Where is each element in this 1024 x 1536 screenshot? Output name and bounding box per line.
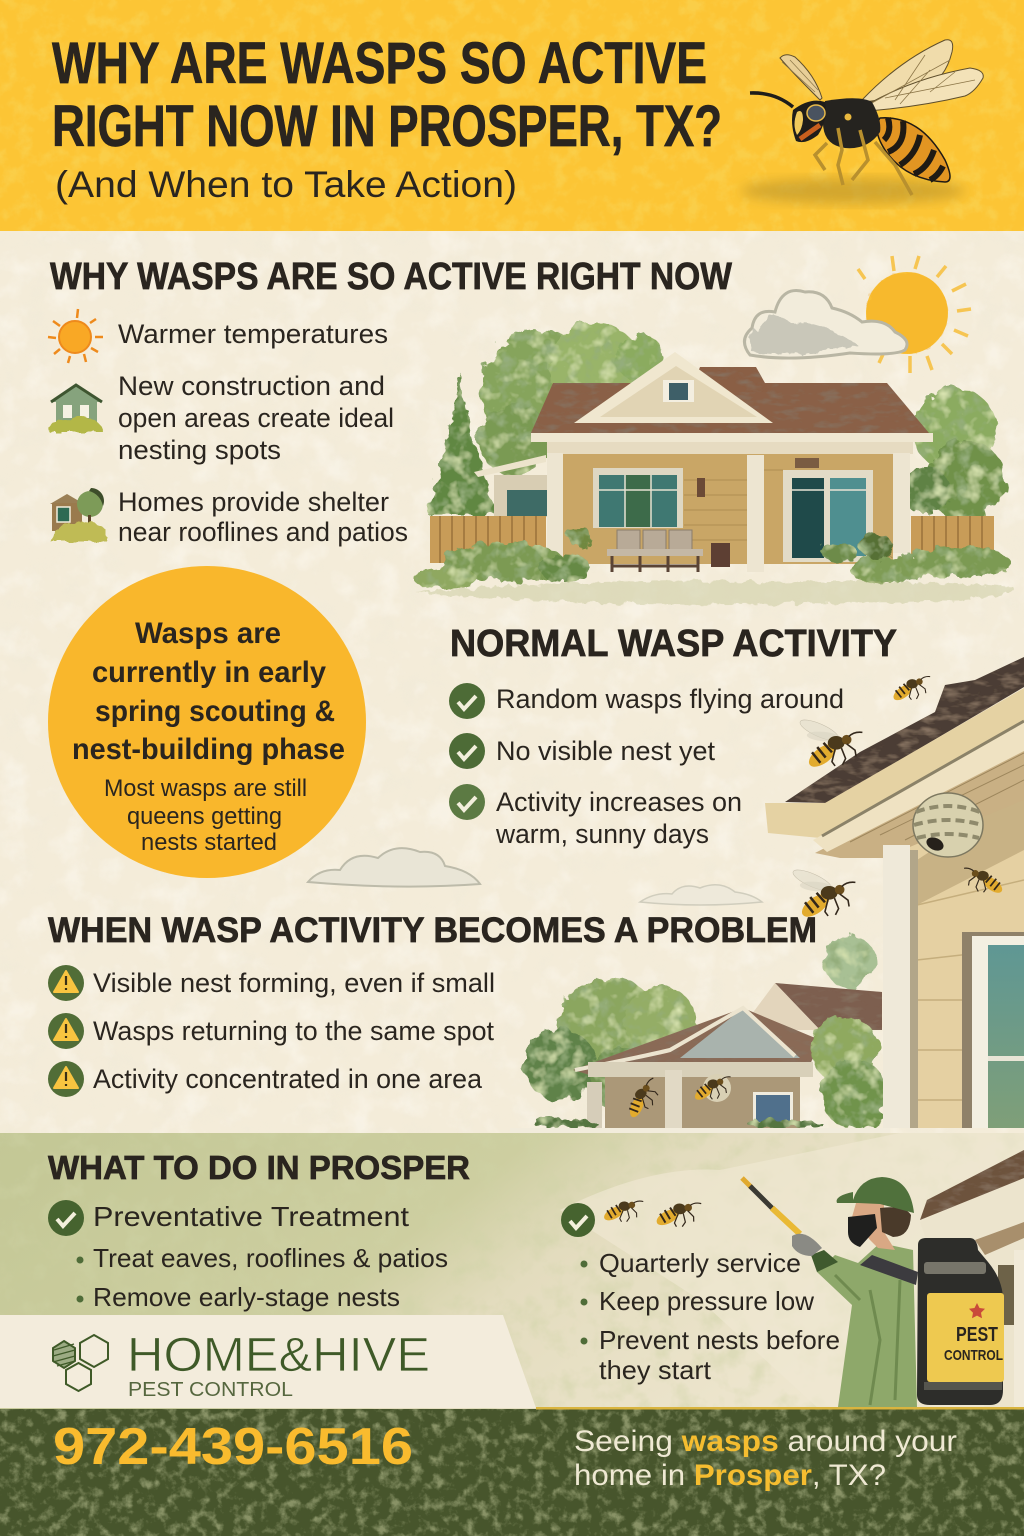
wasp beneath nest	[964, 868, 1005, 896]
patio furniture	[617, 530, 692, 550]
callout circle: spring scouting &	[95, 695, 335, 728]
reason: homes provide shelter	[118, 487, 408, 547]
house wall	[883, 760, 1024, 1128]
footer call to action	[574, 1425, 957, 1492]
list: ongoing service steps: Prevent nests before	[599, 1325, 840, 1355]
wasp flying by column	[791, 866, 855, 921]
list: preventative steps: Treat eaves, rooflines & patios	[93, 1243, 448, 1273]
soffit	[815, 745, 1024, 858]
illustration: sun and cloud	[744, 256, 971, 373]
item: random wasps: Random wasps flying around	[496, 684, 844, 714]
warning 1 text: Visible nest forming, even if small	[93, 968, 495, 998]
cuff	[811, 1250, 838, 1272]
wasp near chimney	[891, 677, 930, 703]
item: warm days	[495, 787, 742, 849]
door and side window	[783, 470, 873, 562]
side wing	[494, 475, 548, 517]
footer band	[0, 1407, 1024, 1536]
jacket	[817, 1243, 917, 1407]
callout circle: nests started	[141, 829, 277, 856]
list: ongoing service steps: Keep pressure low	[599, 1286, 814, 1316]
icon: cottage and tree	[50, 488, 106, 541]
tank label: PEST	[956, 1324, 998, 1346]
window	[962, 932, 1024, 1128]
reason: new construction: nesting spots	[118, 435, 281, 465]
list: ongoing service steps: they start	[599, 1355, 712, 1385]
columns	[547, 453, 563, 560]
wasp on small house left	[618, 1078, 667, 1122]
hair	[880, 1207, 911, 1237]
illustration: pest control technician	[742, 1150, 1024, 1408]
list: warning signs	[48, 965, 495, 1097]
heading: when activity becomes a problem: WHEN WASP ACTIVITY BECOMES A PROBLEM	[48, 911, 817, 950]
callout circle	[48, 566, 366, 878]
footer call to action: Seeing wasps around your	[574, 1425, 957, 1458]
wasp on small house right	[692, 1077, 731, 1103]
illustration: roofline with nest	[765, 657, 1024, 1128]
fascia boards	[765, 688, 1024, 838]
roof shingles	[785, 657, 1024, 803]
fascia and beam	[531, 433, 933, 442]
nest	[913, 793, 983, 857]
cloud near heading	[640, 885, 762, 905]
green band: what to do	[0, 1133, 1024, 1410]
callout circle: Most wasps are still	[104, 775, 307, 802]
reason: new construction	[118, 371, 394, 465]
warning icon 2	[48, 1013, 84, 1049]
callout circle: queens getting	[127, 803, 282, 830]
reason: warmer temperatures: Warmer temperatures	[118, 319, 388, 349]
check: ongoing service	[561, 1203, 595, 1237]
reason: new construction: New construction and	[118, 371, 385, 401]
logo wordmark: HOME&HIVE	[127, 1329, 430, 1382]
tank label: CONTROL	[944, 1347, 1003, 1364]
wall	[563, 452, 893, 564]
header band	[0, 0, 1024, 231]
trees	[428, 322, 1005, 520]
heading: normal wasp activity: NORMAL WASP ACTIVITY	[450, 623, 897, 665]
gable	[574, 352, 773, 423]
mask	[848, 1214, 877, 1247]
item: warm days: warm, sunny days	[495, 819, 709, 849]
strap	[860, 1255, 918, 1285]
check: no visible nest	[449, 733, 485, 769]
list: reasons	[48, 309, 408, 547]
footer call to action: home in Prosper, TX?	[574, 1459, 886, 1492]
icon: sun	[48, 309, 103, 363]
lawn	[415, 581, 1015, 604]
list: ongoing service steps: Quarterly service	[599, 1248, 801, 1278]
reason: homes provide shelter: near rooflines and patios	[118, 517, 408, 547]
warning icon 3	[48, 1061, 84, 1097]
wasp on shingle	[798, 716, 862, 771]
logo panel	[0, 1315, 536, 1408]
title: WHY ARE WASPS SO ACTIVE	[52, 31, 707, 96]
title: RIGHT NOW IN PROSPER, TX?	[52, 94, 722, 159]
list: ongoing service steps	[580, 1248, 840, 1385]
callout circle: nest-building phase	[72, 733, 345, 766]
scene bottom border	[510, 1128, 890, 1133]
main roof	[531, 383, 929, 433]
warning 2 text: Wasps returning to the same spot	[93, 1016, 494, 1046]
list: preventative steps: Remove early-stage nests	[93, 1282, 400, 1312]
glove	[792, 1234, 822, 1256]
check: preventative treatment	[48, 1200, 84, 1236]
icon: green house	[49, 385, 103, 432]
wand	[742, 1178, 752, 1188]
wasp left of sprayer	[601, 1196, 643, 1228]
logo tagline: PEST CONTROL	[128, 1379, 293, 1401]
patio window	[593, 468, 683, 528]
title	[52, 31, 722, 159]
phone number: 972-439-6516	[53, 1418, 413, 1476]
check: warm days	[449, 784, 485, 820]
fences	[430, 516, 994, 563]
callout circle: currently in early	[92, 656, 326, 689]
callout circle: Wasps are	[135, 617, 281, 650]
list: normal activity	[449, 683, 844, 849]
cloud under the circle	[308, 848, 480, 887]
warning icon 1	[48, 965, 84, 1001]
neck and face	[852, 1203, 895, 1250]
item: warm days: Activity increases on	[496, 787, 742, 817]
illustration: small house scene	[510, 936, 890, 1133]
reason: homes provide shelter: Homes provide shelter	[118, 487, 389, 517]
cap	[837, 1177, 914, 1213]
heading: what to do in Prosper: WHAT TO DO IN PROSPER	[48, 1149, 470, 1186]
text: preventative treatment: Preventative Treatment	[93, 1201, 409, 1232]
shrubs	[413, 526, 1010, 589]
background house	[920, 1175, 1024, 1408]
item: no visible nest: No visible nest yet	[496, 736, 715, 766]
subtitle: (And When to Take Action)	[55, 164, 517, 205]
heading: why wasps are active: WHY WASPS ARE SO ACTIVE RIGHT NOW	[50, 256, 732, 298]
logo hexagons	[53, 1335, 108, 1391]
illustration: large wasp	[741, 40, 983, 204]
column	[883, 845, 910, 1128]
reason: new construction: open areas create ideal	[118, 403, 394, 433]
nest on small house	[703, 1074, 731, 1102]
list: preventative steps	[76, 1243, 448, 1312]
check: random wasps	[449, 683, 485, 719]
tank label	[927, 1293, 1004, 1382]
wasp right of sprayer	[653, 1197, 701, 1234]
illustration: house with yard	[413, 322, 1015, 604]
backpack	[917, 1238, 1003, 1405]
warning 3 text: Activity concentrated in one area	[93, 1064, 483, 1094]
